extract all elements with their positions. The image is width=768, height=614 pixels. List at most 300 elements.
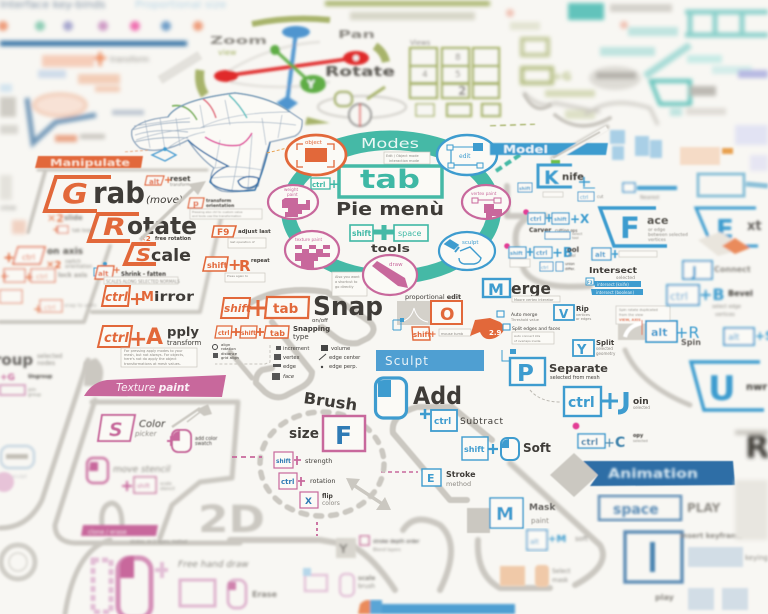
shrink fatten: alt	[98, 270, 109, 278]
knife: shift	[519, 186, 531, 192]
spin: +R	[675, 323, 700, 342]
bool tool: +B	[552, 246, 573, 261]
alt reset	[145, 175, 191, 187]
ctrl apply	[98, 325, 201, 367]
extrude	[696, 208, 762, 256]
color picker: S	[109, 419, 123, 441]
split: geometry	[596, 351, 616, 356]
mask	[467, 498, 556, 533]
proportional edit: shift	[413, 331, 432, 339]
left haze labels	[0, 175, 26, 234]
snap element legend: edge center	[329, 355, 361, 361]
gray arrow to monkey	[140, 181, 206, 240]
merge: M	[488, 280, 504, 299]
group heading	[0, 351, 63, 579]
snap element legend	[272, 345, 361, 380]
merge options: Split edges and faces	[512, 326, 561, 332]
shift space tools	[350, 225, 373, 241]
bool tool: ctrl	[536, 250, 547, 257]
manipulate heading	[35, 156, 143, 169]
separate: Separate	[549, 362, 608, 375]
merge options: Auto connect lots	[514, 334, 541, 338]
blue cursor icon	[152, 147, 176, 161]
panel: modes pie menu: tab	[360, 165, 420, 195]
shift modifiers on left: ✕2	[47, 212, 64, 225]
upper right cluster	[506, 3, 768, 171]
extrude: xt	[747, 219, 762, 234]
background connector paths	[0, 95, 690, 614]
loop tools: Connect	[714, 265, 751, 274]
pie menu title: Pie menù	[336, 199, 444, 220]
big U key: nwr	[746, 382, 767, 393]
group heading: nodes	[37, 360, 55, 367]
rotation: rotation	[310, 477, 336, 485]
orange select keys: mask	[552, 577, 569, 584]
carver: shift	[554, 217, 567, 223]
olive keys	[510, 22, 595, 119]
color picker: picker	[134, 430, 158, 438]
y stroke order	[336, 536, 420, 558]
copy: ctrl	[581, 438, 598, 448]
move stencil: move stencil	[113, 465, 171, 475]
brush size: F	[335, 421, 352, 450]
snapping type	[215, 326, 232, 338]
snap to units	[0, 290, 97, 316]
separate	[502, 349, 608, 387]
flip colors: X	[305, 497, 312, 507]
strength	[274, 452, 332, 468]
panel: modes pie menu: Also you want	[335, 275, 360, 279]
move stencil: scale	[160, 481, 172, 487]
loop tools: vertices	[715, 312, 735, 318]
insert keyframe	[625, 532, 768, 610]
group heading: +G	[0, 373, 15, 383]
proportional edit: proportional edit	[405, 293, 461, 301]
transform orientation: Pressing also ctrl to custom value	[192, 210, 243, 214]
snap section: ctrl	[218, 330, 229, 337]
spin: alt	[651, 326, 667, 339]
loop tools: ctrl	[670, 290, 688, 303]
brush size: Brush	[302, 389, 358, 414]
flip colors: colors	[322, 500, 340, 507]
split	[573, 339, 616, 358]
loop tools: J	[691, 265, 697, 280]
snap to units: snap to units	[64, 303, 97, 309]
split: Y	[576, 343, 587, 358]
shift modifiers on left: switch	[65, 259, 81, 265]
ctrl mirror	[102, 286, 195, 310]
model heading: Model	[503, 144, 548, 156]
texture paint: texture paint	[295, 237, 322, 242]
lock axis: lock axis	[58, 272, 88, 279]
snap element legend: volume	[331, 346, 350, 352]
right margin R key	[735, 428, 768, 540]
y stroke order: Blend layers	[373, 547, 402, 553]
brush size: size	[289, 426, 319, 442]
blender 2.9 badge: 2.9	[489, 329, 502, 337]
mask: paint	[531, 517, 549, 525]
face: vertices	[648, 237, 667, 243]
rotate shortcut: R	[103, 213, 126, 241]
copy: selected	[633, 439, 648, 443]
loop tools: alt	[728, 333, 740, 343]
extrude tool row: Nearest	[640, 195, 660, 201]
transform orientation	[188, 198, 262, 219]
snap element legend: face	[283, 374, 294, 380]
merge: erge	[511, 279, 551, 298]
gizmo labels: Rotate	[325, 65, 395, 80]
olive keys: +G	[553, 70, 571, 83]
rotate shortcut	[89, 212, 197, 243]
intersect: Intersect	[589, 266, 638, 275]
merge options: of overlaps inside	[514, 339, 541, 343]
manipulate heading: Manipulate	[50, 158, 130, 169]
alt face tools: alt	[595, 251, 606, 259]
ctrl apply: +	[129, 327, 147, 352]
panel: modes pie menu: tools	[371, 242, 411, 255]
rotate shortcut: otate	[127, 212, 197, 240]
lock axis	[0, 269, 88, 284]
pink label bar: clone / erase	[88, 529, 127, 536]
knife: ctrl	[580, 195, 588, 201]
texture paint	[285, 231, 339, 269]
ctrl apply: transformations at mesh values.	[124, 362, 181, 366]
panel: modes pie menu: Edit / Object mode	[386, 154, 419, 158]
move stencil: stencil	[160, 486, 175, 492]
soft: Soft	[523, 441, 551, 455]
shrink fatten: Shrink - fatten	[121, 270, 166, 278]
stroke method: E	[427, 472, 435, 485]
scale shortcut	[125, 244, 191, 266]
carver: tool	[572, 236, 579, 240]
shift R repeat	[203, 255, 270, 282]
rip: or edges	[576, 317, 591, 321]
flip colors: flip	[322, 493, 334, 500]
navigation gizmo: Y	[306, 78, 316, 91]
big U key	[691, 362, 767, 410]
intersect: selected	[616, 275, 635, 281]
2D label: 2D	[198, 498, 265, 541]
shrink fatten	[94, 262, 180, 284]
split: Split	[596, 339, 615, 347]
ctrl apply: transform	[167, 339, 201, 347]
sculpt bar: Sculpt	[385, 354, 428, 368]
panel: modes pie menu: +	[329, 177, 339, 191]
bool tool: tool	[568, 253, 576, 258]
teal keys	[568, 3, 768, 116]
texture paint heading	[84, 375, 226, 397]
pink label bar: strokes, on 2-layers, method	[130, 539, 188, 544]
snap section: on/off	[312, 318, 328, 324]
face: ace	[647, 214, 668, 227]
ctrl modifier	[311, 178, 330, 189]
add brush	[376, 378, 462, 418]
shift modifiers on left	[0, 212, 97, 316]
shift modifiers on left: on axis	[47, 247, 83, 257]
copy: +	[604, 436, 615, 451]
dashed links	[125, 124, 535, 171]
weight paint: weight	[284, 187, 298, 192]
shift modifiers on left: ✕2	[46, 260, 61, 271]
copy: C	[615, 435, 625, 451]
rotation: ctrl	[281, 478, 294, 486]
proportional edit: +	[429, 330, 437, 340]
alt reset: transform	[170, 182, 190, 187]
alt reset: reset	[170, 175, 191, 183]
shift R repeat: repeat	[251, 258, 270, 264]
merge	[483, 279, 560, 302]
grab shortcut: rab	[93, 176, 145, 210]
on axis	[3, 247, 45, 266]
top strip of faded headings	[0, 0, 490, 143]
transform orientation: transform	[206, 198, 232, 204]
navigation gizmo: Zoom	[210, 34, 267, 47]
grab shortcut	[45, 176, 183, 211]
stroke method: method	[446, 480, 471, 488]
snap section: Snap	[313, 292, 383, 322]
stroke method	[381, 469, 476, 488]
color picker: Color	[139, 419, 166, 430]
numpad: 8	[455, 53, 461, 63]
pink label bar	[81, 525, 188, 544]
weight paint: paint	[287, 192, 298, 197]
spin	[616, 306, 701, 347]
y stroke order: Y	[338, 542, 348, 556]
left haze labels: view	[0, 204, 16, 212]
spin: from the view	[619, 313, 643, 317]
blender 2.9 badge	[470, 318, 504, 339]
sculpt: sculpt	[462, 240, 479, 246]
group heading: group	[28, 392, 41, 398]
coloured dots	[0, 21, 203, 31]
transform orientation: p	[193, 199, 199, 208]
carver	[523, 209, 590, 240]
separate: P	[517, 361, 534, 387]
F9 adjust last	[212, 226, 271, 248]
add color swatch: swatch	[195, 441, 212, 447]
group heading: join	[27, 387, 36, 393]
bool tool: ool	[567, 246, 579, 254]
object mode	[286, 135, 346, 175]
knife	[518, 160, 604, 201]
subtract: ctrl	[434, 417, 451, 427]
draw	[363, 255, 417, 295]
ctrl apply: mesh, but not always. For objects,	[124, 353, 184, 357]
rip: vertices	[576, 313, 590, 317]
color picker	[98, 404, 212, 441]
align and dashed helper	[212, 342, 270, 364]
loop tools	[667, 261, 768, 345]
snap section: type	[293, 333, 309, 341]
align and dashed helper: distance	[221, 351, 238, 356]
double arrow	[346, 478, 391, 510]
free hand draw tools: Erase	[252, 590, 278, 599]
face	[600, 208, 688, 246]
free hand draw tools: brush	[358, 583, 375, 590]
panel: modes pie menu: ctrl	[312, 181, 325, 189]
weight paint	[268, 185, 318, 219]
add color swatch	[167, 430, 217, 452]
grab shortcut: (move)	[146, 195, 183, 206]
mask soft keys: +M	[548, 534, 566, 545]
snap element legend: increment	[283, 346, 309, 352]
tab key	[339, 166, 442, 197]
mask soft keys: alt	[530, 538, 539, 546]
snap to units: +	[33, 302, 43, 316]
orange key cluster	[34, 52, 149, 116]
knife: nife	[562, 172, 584, 183]
numpad: 2	[458, 84, 466, 98]
bool tool	[504, 243, 579, 271]
orbit ellipse and mouse	[318, 96, 406, 118]
spin: Spin	[681, 338, 701, 347]
copy: opy	[633, 433, 644, 439]
mask: Mask	[529, 503, 556, 513]
shift modifiers on left: slide	[64, 214, 83, 222]
loop tools: Bevel	[728, 289, 753, 298]
merge: Moore vertex interator	[514, 298, 554, 302]
bool tool: differ.	[565, 267, 575, 271]
flip colors	[300, 492, 340, 508]
rip: Rip	[576, 305, 589, 313]
mask: M	[496, 504, 514, 525]
merge options: Threshold value	[510, 318, 539, 322]
shrink fatten: SCALES ALONG SELECTED NORMALS	[106, 279, 180, 284]
snap keys	[221, 298, 250, 318]
knife: K	[544, 167, 560, 189]
carver: +X	[570, 212, 590, 226]
strength: strength	[305, 457, 332, 465]
knife: cut	[597, 194, 604, 199]
big U key: U	[708, 369, 736, 409]
panel: modes pie menu: space	[398, 229, 422, 238]
transform orientation: and tools use the transformation	[192, 214, 241, 218]
navigation gizmo: view	[218, 48, 237, 57]
ctrl apply: pply	[167, 325, 199, 339]
extrude: E	[716, 215, 734, 245]
rip: V	[559, 307, 569, 321]
brush size	[260, 389, 391, 516]
navigation gizmo: Pan	[338, 28, 375, 41]
snap element legend: edge	[283, 364, 296, 370]
lock axis: +	[24, 270, 34, 284]
ctrl mirror: M	[141, 290, 154, 305]
snap section	[212, 292, 383, 380]
bool tool: ctrl	[541, 265, 548, 271]
merge options	[497, 311, 561, 344]
mask soft keys: soft	[575, 535, 588, 543]
face: F	[620, 211, 640, 245]
align and dashed helper: rotation	[221, 346, 236, 351]
bool tool: union	[565, 262, 575, 266]
subtract: Subtract	[460, 417, 503, 427]
panel: modes pie menu: shift	[352, 229, 372, 238]
navigation gizmo	[160, 19, 406, 126]
mask soft keys	[527, 530, 588, 550]
edit mode: edit	[459, 153, 471, 160]
move stencil: shift	[137, 483, 151, 490]
on axis: +	[3, 250, 15, 266]
sculpt	[439, 232, 495, 270]
alt reset: alt	[149, 178, 160, 186]
space play: space	[613, 502, 659, 518]
sculpt bar	[376, 350, 484, 371]
on axis: ctrl	[22, 253, 35, 262]
free hand draw tools	[93, 556, 375, 614]
proportional edit: O	[440, 305, 454, 325]
vertex paint: vertex paint	[471, 191, 497, 196]
scale shortcut: S	[136, 245, 151, 266]
soft: shift	[464, 445, 485, 454]
lock axis: ctrl	[36, 273, 47, 281]
rotate shortcut: ✕2	[140, 235, 151, 243]
y stroke order: stroke depth order	[373, 539, 420, 545]
ctrl apply: ctrl	[104, 331, 129, 346]
subtract	[420, 409, 503, 431]
carver: ctrl	[530, 216, 541, 223]
edit mode	[437, 135, 497, 175]
align and dashed helper: align	[221, 342, 231, 347]
object mode: object	[305, 140, 323, 146]
shift modifiers on left: +	[52, 223, 61, 236]
join: oin	[633, 397, 649, 407]
panel: modes pie menu: a shortcut to	[335, 280, 357, 284]
texture paint heading: Texture paint	[116, 382, 190, 394]
add color swatch: add color	[195, 436, 217, 442]
blue bar	[0, 41, 187, 46]
space play: PLAY	[687, 501, 721, 515]
ctrl mirror: +	[129, 288, 145, 310]
ctrl mirror: ctrl	[105, 290, 129, 304]
snap to units: ctrl	[44, 304, 55, 312]
rip	[554, 305, 591, 321]
orange select keys: Select	[552, 568, 571, 575]
group heading: selected	[37, 353, 63, 360]
ctrl apply: For pressing apply modes to your	[124, 349, 183, 353]
carver: cutting ops	[555, 228, 577, 233]
draw: draw	[389, 262, 403, 268]
dashed ring	[260, 412, 384, 516]
split: selected	[596, 346, 613, 351]
F9 adjust last: adjust last	[238, 229, 271, 235]
insert keyframe: Insert keyframe	[680, 532, 743, 540]
group heading: sculpt	[12, 474, 27, 480]
orange key cluster: transform	[110, 55, 149, 64]
modes label: Modes	[361, 137, 419, 152]
group heading: Ungroup	[28, 374, 53, 380]
animation label: Animation	[608, 467, 698, 482]
purple haze	[738, 70, 768, 78]
transform orientation: orientation	[206, 203, 234, 209]
shift R repeat: shift	[207, 261, 228, 270]
ring	[288, 143, 494, 277]
carver: Carver	[529, 227, 551, 234]
ctrl mirror: irror	[154, 290, 195, 305]
alt reset: +	[164, 175, 172, 186]
join: ctrl	[568, 395, 595, 411]
numpad: 5	[455, 70, 461, 80]
move stencil	[87, 458, 175, 493]
spin: VIEW, AXIS	[619, 318, 641, 322]
F9 adjust last: F9	[217, 228, 229, 238]
loop tools: +B	[699, 285, 725, 304]
lock axis: +	[0, 269, 10, 283]
intersect	[586, 266, 643, 295]
join: selected	[633, 405, 650, 410]
stroke method: Stroke	[446, 470, 476, 479]
carver: select	[572, 232, 583, 236]
free hand draw tools: scale	[358, 575, 375, 582]
